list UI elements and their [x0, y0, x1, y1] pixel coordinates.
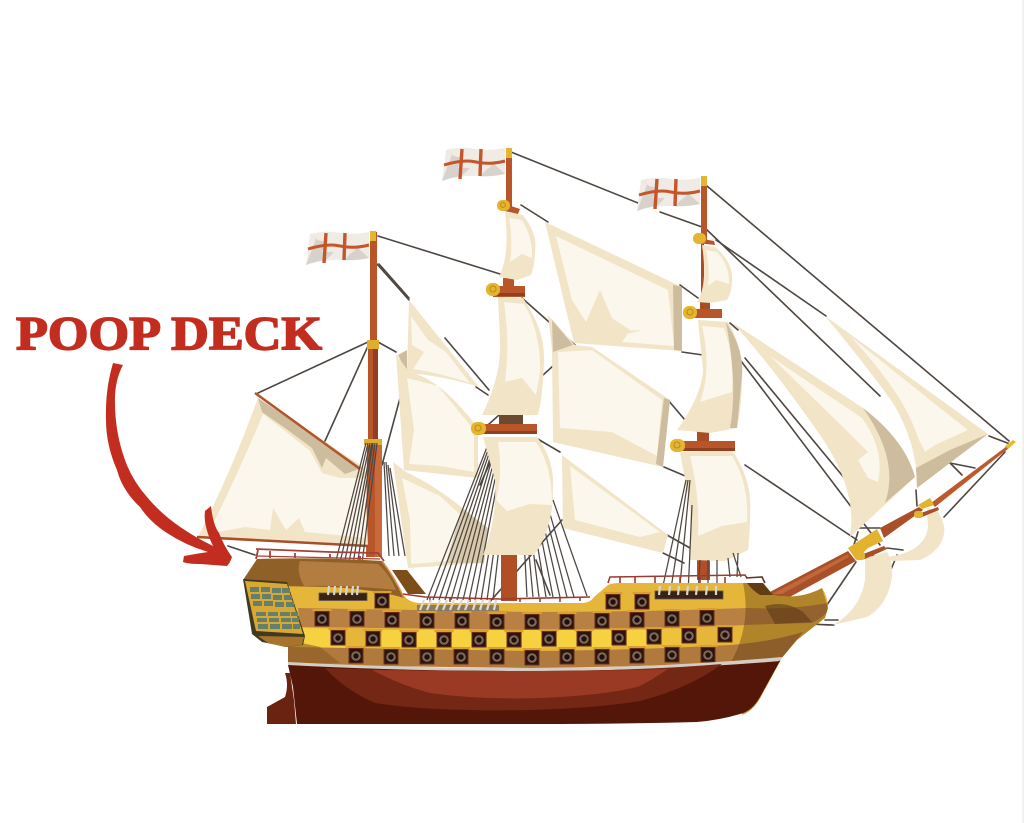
yard: main middle: [486, 283, 525, 297]
hull bow edge: [742, 660, 780, 714]
yard: fore middle: [683, 306, 722, 319]
hull upper: [243, 549, 828, 668]
main mast shrouds: [427, 442, 587, 600]
yard: fore top: [693, 233, 715, 245]
right edge strip: [1022, 0, 1024, 823]
mast: fore: [697, 176, 710, 580]
mast: mizzen: [364, 231, 382, 557]
forecastle shade: [747, 583, 773, 595]
mast: main: [499, 148, 523, 601]
sail: jib two: [825, 316, 988, 488]
fore shrouds: [661, 480, 741, 595]
poop shrouds: [329, 443, 377, 588]
sail: main middle: [482, 297, 544, 415]
structure behind poop: [392, 570, 426, 594]
yard: main top: [497, 200, 520, 214]
arrow: [106, 363, 232, 566]
rudder: [267, 673, 296, 724]
sail: mizzen square: [396, 354, 478, 478]
sail: jib one: [733, 323, 915, 537]
stern gallery: [243, 579, 305, 647]
deck rail: [403, 594, 590, 602]
red lower hull: [267, 660, 780, 724]
hull light layer: [372, 669, 668, 698]
masts: [364, 148, 710, 601]
sail: lower spritsail: [833, 552, 892, 625]
pins: forecastle: [655, 586, 723, 599]
hull band lower cannon row: [288, 632, 803, 668]
bowsprit sails: [833, 508, 944, 625]
gallery windows: [250, 587, 300, 629]
ship illustration: [197, 148, 1016, 724]
sail: spanker: [197, 393, 368, 546]
hull dark layer: [288, 661, 780, 724]
rigging stays: [228, 152, 1010, 625]
sail: mizzen staysail top: [398, 300, 479, 387]
flag: fore: [637, 178, 700, 211]
yards: [471, 200, 735, 452]
hull white stripe: [288, 657, 782, 671]
sail: main lower: [483, 437, 553, 555]
hull gold base: [257, 558, 828, 665]
heading: POOP DECK: POOP DECK: [16, 308, 322, 360]
hull band middle yellow squares: [300, 628, 682, 649]
poop rail: [256, 549, 384, 561]
sail: mizzen lower: [393, 462, 488, 568]
yard: main lower: [471, 422, 537, 435]
pins: poop: [319, 586, 367, 600]
sail: large upper staysail: [545, 222, 682, 351]
bow shading: [730, 583, 828, 664]
forecastle rail: [608, 575, 765, 583]
rear shrouds behind sails: [384, 462, 405, 556]
stern shading: [288, 640, 340, 665]
flags: [306, 148, 700, 265]
pins: mid deck: [417, 600, 499, 611]
bowsprit: [766, 440, 1016, 599]
yard: fore lower: [670, 439, 735, 452]
sail: fore middle: [677, 320, 742, 433]
sail: large lower staysail: [562, 455, 668, 553]
sail: upper spritsail: [887, 508, 944, 561]
hull band top cannon row: [298, 603, 828, 630]
flag: main: [442, 148, 505, 181]
sail: large middle staysail: [548, 315, 670, 467]
flag: mizzen: [306, 232, 369, 265]
hull mid layer: [325, 664, 722, 710]
poop brown upper: [243, 558, 404, 598]
sail: fore lower: [680, 450, 750, 561]
sail: main top: [499, 212, 536, 280]
gun ports: [312, 591, 734, 666]
sail: fore top: [697, 245, 732, 303]
